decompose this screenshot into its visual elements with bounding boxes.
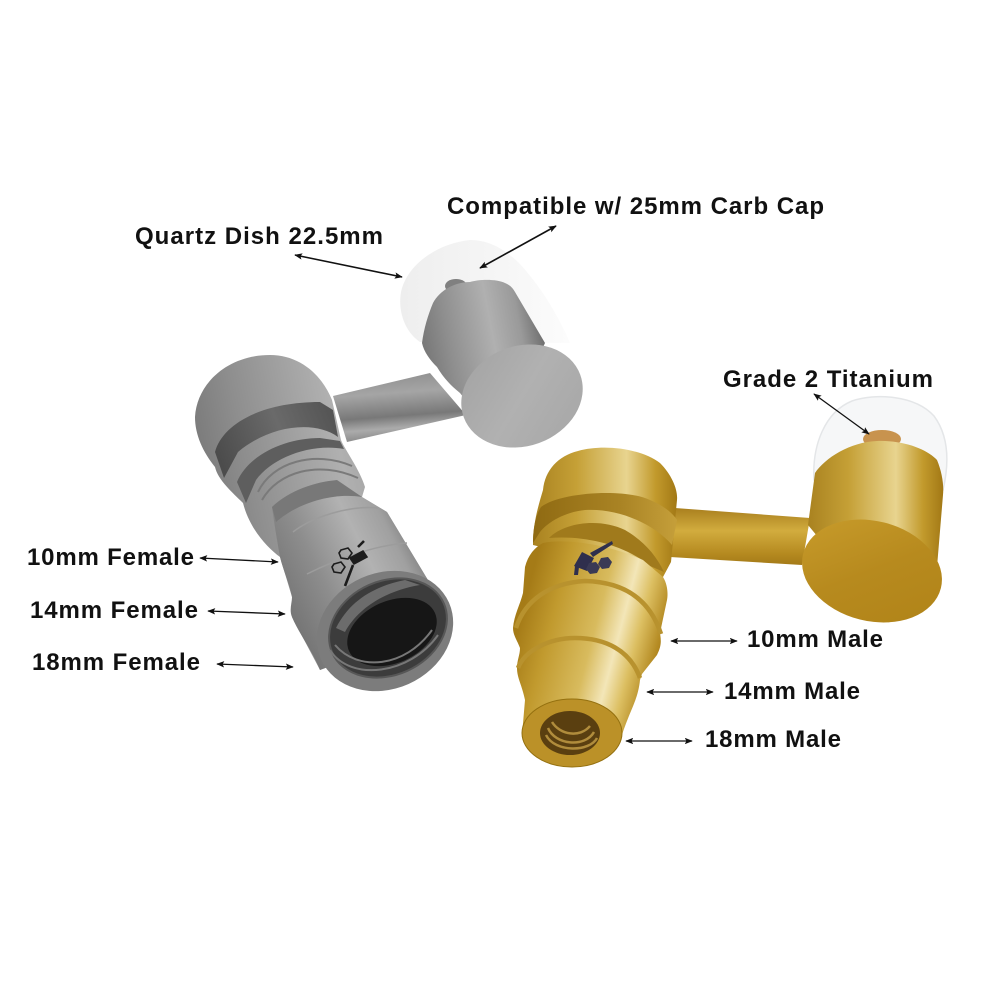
label: 18mm Male: 18mm Male (705, 726, 841, 753)
threaded hole, gold (540, 711, 600, 755)
arrow: 10mm female (200, 558, 278, 562)
arrow: quartz dish (295, 255, 402, 277)
first step ridge, gold (516, 581, 661, 634)
product: gold titanium nail (513, 397, 953, 767)
arrow: 14mm male (647, 691, 713, 693)
arrow: 14mm female (208, 611, 285, 614)
quartz dish, silver (400, 240, 570, 343)
mouth interior, silver (313, 560, 463, 696)
groove band, gold (533, 493, 677, 545)
stem, silver (333, 373, 466, 442)
end disc, gold (791, 505, 953, 637)
end disc, silver (447, 328, 597, 464)
stem, gold (670, 508, 810, 565)
connector body, silver (272, 480, 452, 670)
label: Quartz Dish 22.5mm: Quartz Dish 22.5mm (135, 223, 383, 250)
dark gap crescent, gold (549, 523, 664, 572)
label: 10mm Female: 10mm Female (27, 544, 194, 571)
upper cylinder, gold (808, 441, 943, 600)
inner seat highlight, silver (336, 580, 420, 632)
label: 10mm Male: 10mm Male (747, 626, 883, 653)
label: 14mm Female: 14mm Female (30, 597, 198, 624)
second step ridge, gold (518, 638, 640, 678)
arrow: titanium (814, 394, 869, 434)
inner dark well, silver (336, 585, 448, 679)
quartz dish, gold (814, 397, 947, 490)
honey dipper logo, gold (574, 541, 613, 575)
second groove, silver (237, 438, 344, 503)
hole threads, gold (546, 722, 597, 749)
label: 18mm Female: 18mm Female (32, 649, 200, 676)
inner thread highlight, silver (330, 630, 438, 670)
stepped body, gold (513, 541, 668, 735)
top cap, gold (533, 448, 677, 577)
arrow: 10mm male (671, 640, 737, 642)
upper cylinder, silver (422, 280, 545, 440)
cap and connector silhouette, silver (195, 355, 452, 670)
bead tip, gold (863, 430, 901, 448)
mouth rim, silver (297, 550, 473, 712)
label: Compatible w/ 25mm Carb Cap: Compatible w/ 25mm Carb Cap (447, 193, 824, 220)
thread lines, silver (258, 459, 358, 500)
label: 14mm Male: 14mm Male (724, 678, 860, 705)
label: Grade 2 Titanium: Grade 2 Titanium (723, 366, 933, 393)
neck shadow, silver (272, 480, 362, 522)
arrow: 18mm female (217, 664, 293, 667)
step edge, silver (293, 508, 407, 574)
logo, silver (332, 541, 367, 586)
dark groove, silver (215, 402, 338, 478)
arrow: 18mm male (626, 740, 692, 742)
center pin, silver (445, 279, 467, 293)
tip face, gold (522, 699, 622, 767)
arrow: carb cap (480, 226, 556, 268)
product: silver titanium nail (195, 240, 597, 712)
